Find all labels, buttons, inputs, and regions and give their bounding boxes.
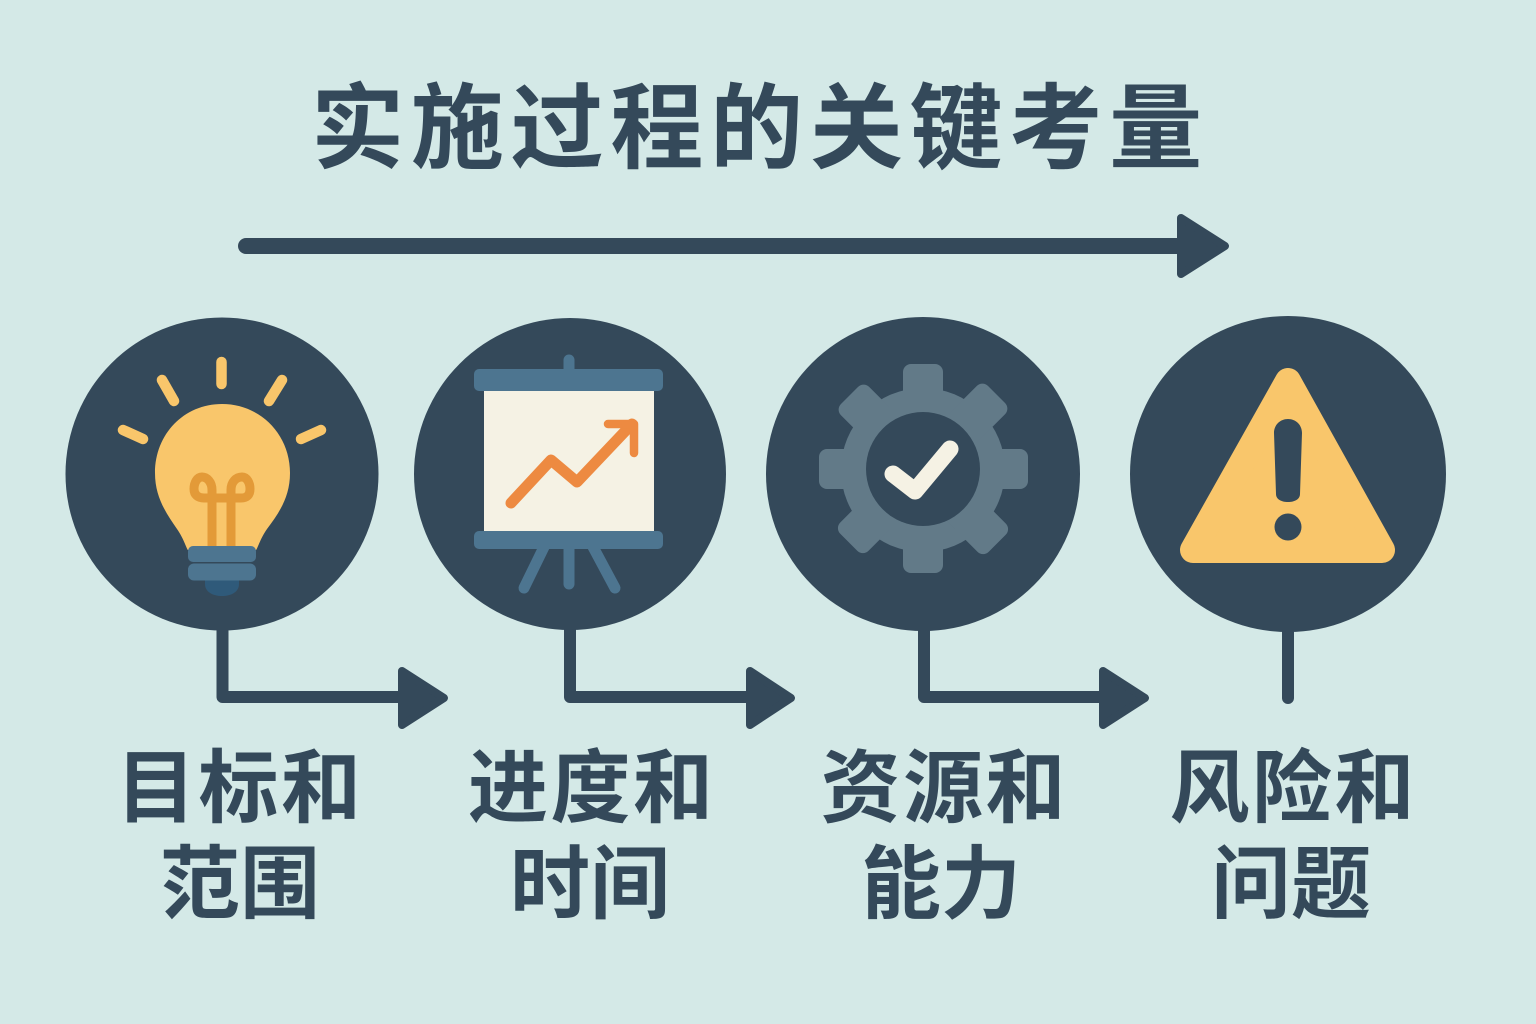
label: resources and capability: 能力 [861, 840, 1021, 929]
label: progress and time [468, 744, 716, 929]
connector line 4 [1282, 625, 1294, 698]
label: risks and issues [1170, 744, 1417, 929]
label: progress and time: 时间 [510, 840, 670, 929]
icon: gear with check [766, 317, 1080, 631]
title: 实施过程的关键考量 [311, 77, 1209, 181]
icon: presentation board [414, 318, 726, 630]
label: risks and issues: 问题 [1211, 840, 1371, 929]
label: goal and scope: 范围 [160, 840, 320, 929]
icon: warning triangle [1130, 316, 1446, 632]
icon: light bulb [66, 318, 378, 630]
label: resources and capability [820, 744, 1068, 929]
label: goal and scope [116, 744, 364, 929]
label: resources and capability: 资源和 [820, 744, 1068, 833]
label: risks and issues: 风险和 [1170, 744, 1417, 833]
label: progress and time: 进度和 [468, 744, 716, 833]
connector arrow 1 [222, 625, 444, 725]
connector arrow 2 [570, 625, 791, 725]
label: goal and scope: 目标和 [116, 744, 364, 833]
connector arrow 3 [924, 625, 1145, 725]
top timeline arrow [246, 218, 1225, 274]
